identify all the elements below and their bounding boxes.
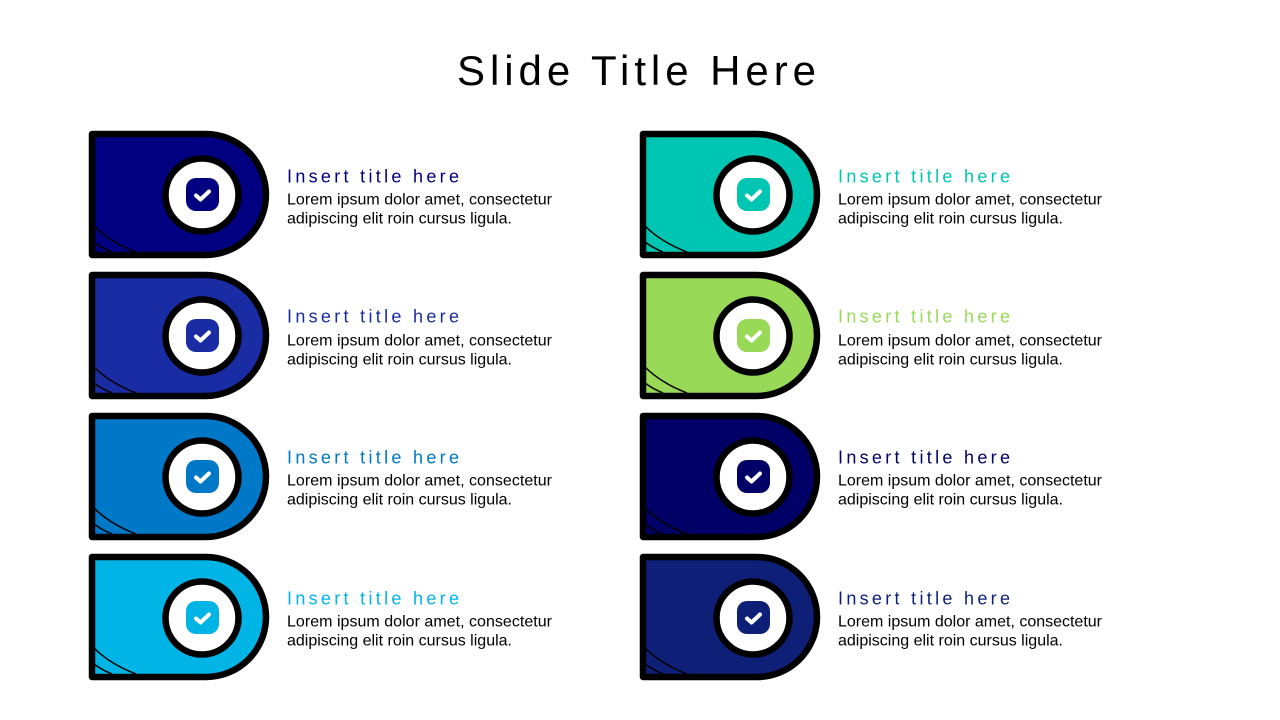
card 8: indigo xyxy=(643,557,1103,677)
corner lines xyxy=(645,648,687,674)
text block: Lorem ipsum dolor amet, consectetur xyxy=(287,332,553,350)
text block: adipiscing elit roin cursus ligula. xyxy=(287,632,512,650)
badge shape xyxy=(643,275,817,396)
text block xyxy=(287,166,553,228)
text block: Insert title here xyxy=(838,306,1010,326)
text block: Lorem ipsum dolor amet, consectetur xyxy=(838,192,1103,208)
text block xyxy=(838,448,1103,508)
card 2: royal blue xyxy=(92,275,553,396)
text block xyxy=(838,306,1103,368)
badge shape xyxy=(92,134,266,255)
icon: check circle xyxy=(716,158,790,232)
icon: check circle xyxy=(716,440,790,514)
text block: adipiscing elit roin cursus ligula. xyxy=(287,210,512,228)
text block: Insert title here xyxy=(838,588,1010,608)
text block: Insert title here xyxy=(287,306,459,326)
icon: check circle xyxy=(166,440,238,514)
corner lines xyxy=(94,648,136,674)
card 7: dark navy xyxy=(643,416,1103,537)
badge shape xyxy=(643,134,817,255)
corner lines xyxy=(645,226,687,252)
badge shape xyxy=(92,557,266,677)
text block: Insert title here xyxy=(287,448,459,468)
card 6: green xyxy=(643,275,1103,396)
text block: adipiscing elit roin cursus ligula. xyxy=(838,492,1063,508)
text block: Lorem ipsum dolor amet, consectetur xyxy=(838,332,1103,350)
text block: adipiscing elit roin cursus ligula. xyxy=(838,352,1063,368)
text block: Insert title here xyxy=(287,588,459,608)
badge shape xyxy=(643,416,817,537)
icon: check circle xyxy=(716,582,790,654)
text block: Lorem ipsum dolor amet, consectetur xyxy=(287,472,553,490)
card 3: mid blue xyxy=(92,416,553,537)
corner lines xyxy=(94,226,136,252)
corner lines xyxy=(645,508,687,534)
text block: Lorem ipsum dolor amet, consectetur xyxy=(838,472,1103,490)
corner lines xyxy=(645,367,687,393)
text block: Lorem ipsum dolor amet, consectetur xyxy=(287,192,553,208)
text block xyxy=(838,166,1103,228)
badge shape xyxy=(92,416,266,537)
icon: check circle xyxy=(716,300,790,372)
text block xyxy=(838,588,1103,650)
icon: check circle xyxy=(166,158,238,232)
text block: adipiscing elit roin cursus ligula. xyxy=(838,210,1063,228)
icon: check circle xyxy=(166,582,238,654)
text block: adipiscing elit roin cursus ligula. xyxy=(838,632,1063,650)
text block: Lorem ipsum dolor amet, consectetur xyxy=(287,614,553,630)
badge shape xyxy=(643,557,817,677)
text block: Insert title here xyxy=(838,166,1010,186)
title: Slide Title Here xyxy=(457,47,816,94)
card 4: sky blue xyxy=(92,557,553,677)
card 1: navy xyxy=(92,134,553,255)
text block: adipiscing elit roin cursus ligula. xyxy=(287,352,512,368)
text block xyxy=(287,306,553,368)
text block: Insert title here xyxy=(838,448,1010,468)
corner lines xyxy=(94,367,136,393)
text block: Lorem ipsum dolor amet, consectetur xyxy=(838,614,1103,630)
text block: adipiscing elit roin cursus ligula. xyxy=(287,492,512,508)
text block xyxy=(287,588,553,650)
text block: Insert title here xyxy=(287,166,459,186)
card 5: teal xyxy=(643,134,1103,255)
corner lines xyxy=(94,508,136,534)
icon: check circle xyxy=(166,300,238,372)
text block xyxy=(287,448,553,508)
badge shape xyxy=(92,275,266,396)
